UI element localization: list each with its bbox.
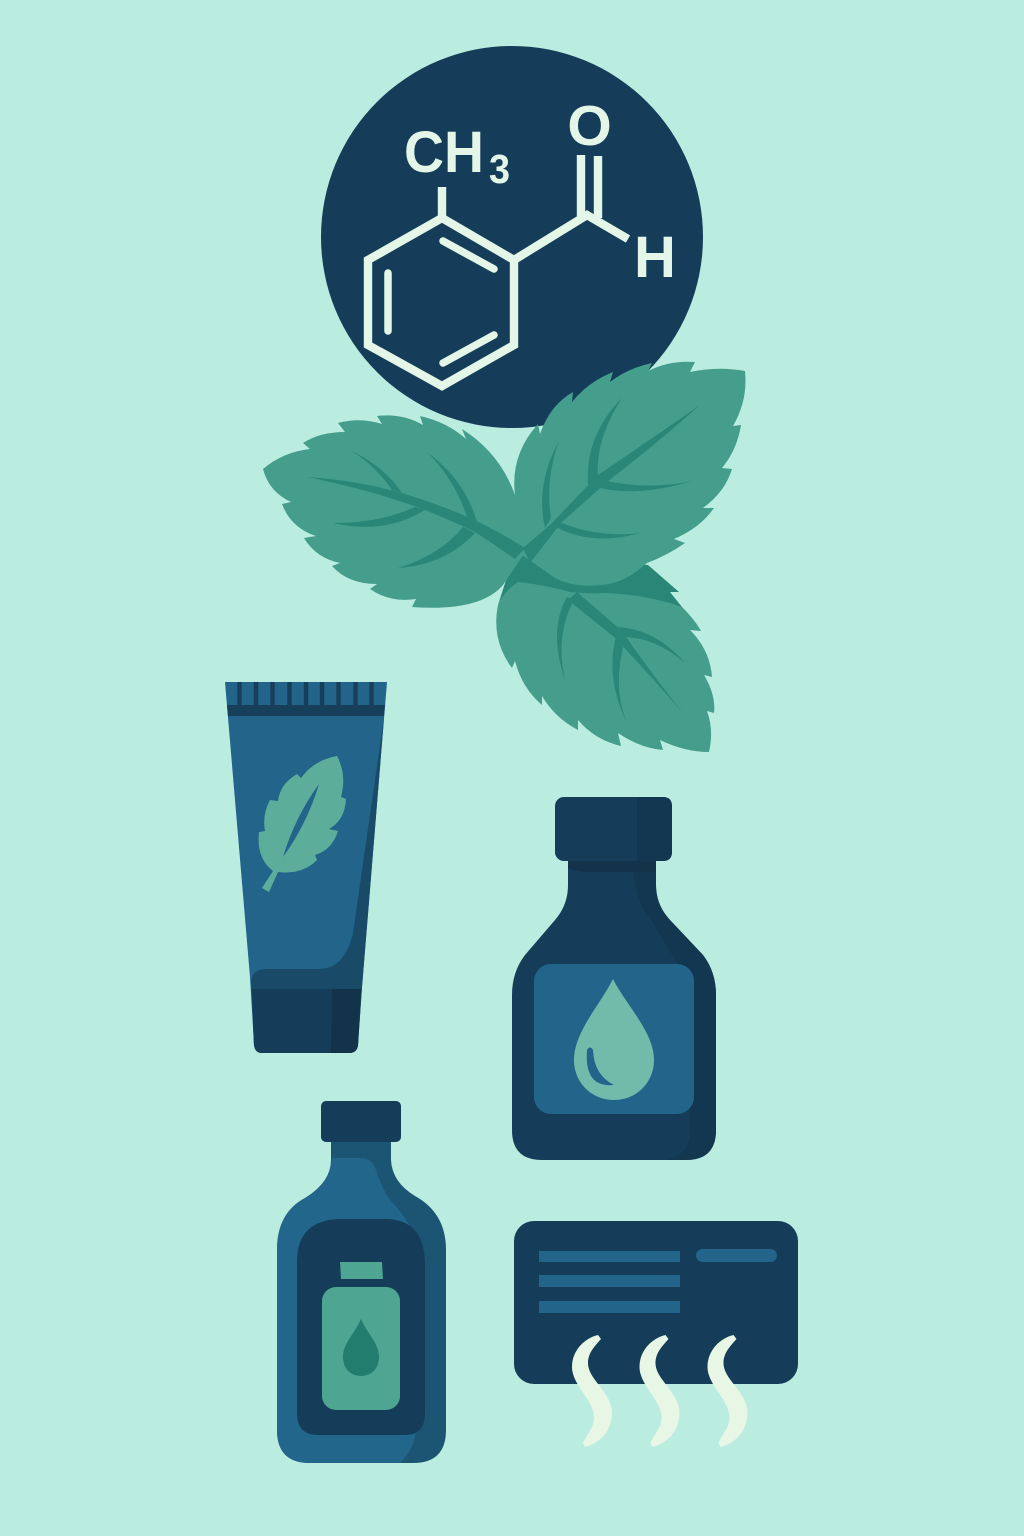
- label: [534, 964, 694, 1114]
- drop: [343, 1319, 379, 1376]
- mint leaves: [263, 362, 746, 752]
- lighter bottle face: [277, 1158, 418, 1463]
- tube right and lower shade: [251, 718, 384, 1053]
- dark shadow wedge: [498, 545, 682, 607]
- drop icon: [574, 979, 654, 1100]
- cap: [321, 1101, 401, 1142]
- body shade: [633, 870, 716, 1160]
- lower right leaf: [496, 562, 714, 752]
- text lines: [539, 1249, 777, 1313]
- label CH3: 3: [489, 146, 510, 192]
- leaf veins: lower leaf: [557, 592, 685, 725]
- benzene ring and bonds: [368, 155, 628, 386]
- product: dark bottle: [512, 797, 716, 1160]
- mini bottle icon: [322, 1262, 400, 1410]
- label O: O: [567, 94, 612, 158]
- leaf icon: [259, 756, 346, 892]
- left leaf: [263, 415, 530, 608]
- tube cap: [252, 989, 361, 1053]
- product: scent card with vapor: [514, 1221, 798, 1447]
- product: toothpaste tube: [225, 682, 387, 1053]
- crimp band: [227, 705, 385, 716]
- leaf veins: upper leaf: [523, 398, 700, 563]
- label panel: [297, 1219, 425, 1435]
- cap: [555, 797, 672, 861]
- card: [514, 1221, 798, 1384]
- upper right leaf: [514, 362, 746, 586]
- tube body: [225, 682, 387, 1053]
- label H: H: [634, 225, 676, 290]
- neck shadow: [568, 861, 656, 872]
- body: [277, 1140, 446, 1463]
- crimp ridges: [240, 682, 372, 705]
- label CH3: CH: [404, 120, 484, 185]
- neck and body: [512, 858, 716, 1160]
- vapor wisps: [572, 1335, 748, 1447]
- molecule badge: 2-methylbenzaldehyde: [321, 46, 703, 428]
- leaf veins: left leaf: [308, 450, 525, 568]
- product: blue bottle: [277, 1101, 446, 1463]
